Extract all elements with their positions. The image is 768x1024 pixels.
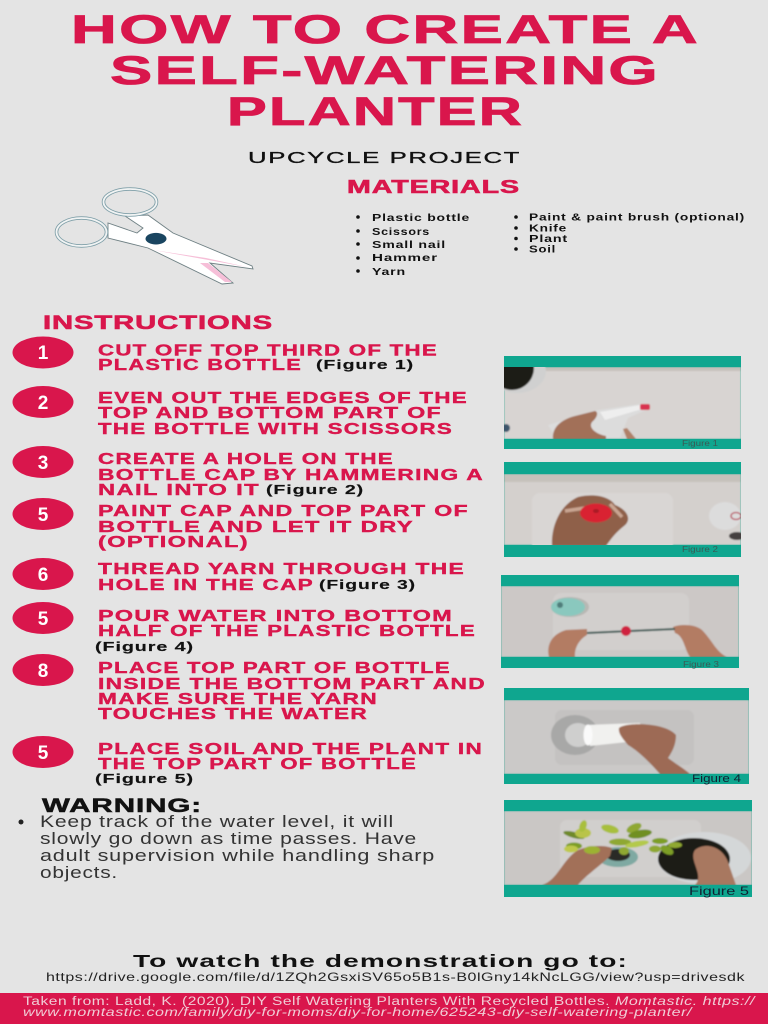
materials list: right column: Soil — [529, 244, 556, 256]
step 7 — [12, 654, 486, 723]
step 1 — [12, 336, 438, 374]
materials list: left column: Yarn — [372, 266, 406, 278]
step 6: POUR WATER INTO BOTTOM — [98, 608, 453, 625]
step 1: CUT OFF TOP THIRD OF THE — [98, 342, 438, 360]
step 8: 5 — [38, 743, 49, 764]
title — [71, 8, 700, 134]
step 7: TOUCHES THE WATER — [98, 706, 368, 723]
step 8: PLACE SOIL AND THE PLANT IN — [98, 741, 483, 758]
step 1: 1 — [38, 343, 49, 364]
step 8 — [12, 736, 483, 786]
step 6 — [12, 602, 476, 654]
figure 3 photo: Figure 3 — [683, 660, 720, 669]
figure 1 photo: Figure 1 — [682, 439, 719, 448]
warning text — [18, 813, 435, 882]
step 4: 5 — [38, 505, 49, 526]
step 3: 3 — [38, 453, 48, 474]
figure 4 photo — [504, 688, 749, 785]
heading: instructions: INSTRUCTIONS — [43, 312, 273, 334]
icon: scissors — [56, 189, 253, 284]
step 4: BOTTLE AND LET IT DRY — [98, 519, 414, 536]
figure 5 photo: Figure 5 — [689, 884, 749, 898]
figure 1 photo — [504, 356, 741, 449]
step 2: 2 — [38, 393, 48, 414]
step 1: (Figure 1) — [316, 357, 414, 372]
step 5 — [12, 558, 465, 594]
step 3: NAIL INTO IT — [98, 482, 260, 499]
step 8: (Figure 5) — [95, 771, 194, 786]
step 2 — [12, 386, 468, 438]
warning text: adult supervision while handling sharp — [40, 847, 435, 865]
step 4 — [12, 498, 469, 551]
warning heading: WARNING: — [42, 795, 202, 817]
demonstration link: https://drive.google.com/file/d/1ZQh2GsxiSV65o5B1s-B0lGny14kNcLGG/view?usp=drivesdk — [46, 970, 746, 984]
step 3: CREATE A HOLE ON THE — [98, 451, 394, 468]
step 5: THREAD YARN THROUGH THE — [98, 561, 465, 578]
footer citation band: Momtastic. https:// — [615, 996, 757, 1008]
step 3: BOTTLE CAP BY HAMMERING A — [98, 467, 484, 484]
step 2: THE BOTTLE WITH SCISSORS — [98, 421, 453, 438]
step 4: (OPTIONAL) — [98, 534, 249, 551]
step 7: MAKE SURE THE YARN — [98, 691, 378, 708]
step 5: (Figure 3) — [319, 577, 416, 592]
footer citation band: www.momtastic.com/family/diy-for-moms/diy-for-home/625243-diy-self-watering-planter/ — [23, 1007, 694, 1019]
materials list: right column: Knife — [529, 222, 567, 234]
step 7: PLACE TOP PART OF BOTTLE — [98, 660, 451, 677]
materials list: right column: Paint & paint brush (optional) — [529, 212, 745, 224]
warning text: slowly go down as time passes. Have — [40, 830, 417, 848]
step 5: HOLE IN THE CAP — [98, 577, 314, 594]
subtitle: UPCYCLE PROJECT — [248, 150, 521, 167]
demonstration heading: To watch the demonstration go to: — [133, 951, 628, 971]
warning text: Keep track of the water level, it will — [40, 813, 394, 831]
step 3 — [12, 446, 484, 499]
materials list: left column: Scissors — [372, 226, 430, 238]
step 4: PAINT CAP AND TOP PART OF — [98, 503, 469, 520]
step 1: PLASTIC BOTTLE — [98, 357, 302, 374]
footer citation band — [0, 993, 768, 1024]
title: HOW TO CREATE A — [71, 8, 700, 52]
figure 2 photo — [504, 462, 745, 557]
step 6: (Figure 4) — [95, 639, 194, 654]
footer citation band: Taken from: Ladd, K. (2020). DIY Self Watering Planters With Recycled Bottles. — [23, 996, 610, 1008]
figure 5 photo — [504, 800, 752, 898]
step 6: HALF OF THE PLASTIC BOTTLE — [98, 623, 476, 640]
materials list: right column — [514, 212, 745, 256]
materials list: right column: Plant — [529, 233, 568, 245]
step 7: INSIDE THE BOTTOM PART AND — [98, 676, 486, 693]
figure 3 photo — [501, 575, 739, 669]
materials list: left column — [356, 212, 470, 278]
title: SELF-WATERING — [110, 49, 660, 93]
warning text: objects. — [40, 864, 118, 882]
figure 4 photo: Figure 4 — [692, 773, 741, 785]
step 8: THE TOP PART OF BOTTLE — [98, 756, 417, 773]
heading: materials: MATERIALS — [347, 176, 520, 197]
materials list: left column: Small nail — [372, 239, 446, 251]
step 7: 8 — [38, 661, 48, 682]
step 3: (Figure 2) — [266, 482, 364, 497]
title: PLANTER — [227, 90, 524, 134]
step 5: 6 — [38, 565, 48, 586]
step 2: TOP AND BOTTOM PART OF — [98, 405, 442, 422]
step 2: EVEN OUT THE EDGES OF THE — [98, 390, 468, 407]
figure 2 photo: Figure 2 — [682, 545, 719, 554]
materials list: left column: Hammer — [372, 252, 438, 264]
materials list: left column: Plastic bottle — [372, 212, 470, 224]
step 6: 5 — [38, 609, 49, 630]
